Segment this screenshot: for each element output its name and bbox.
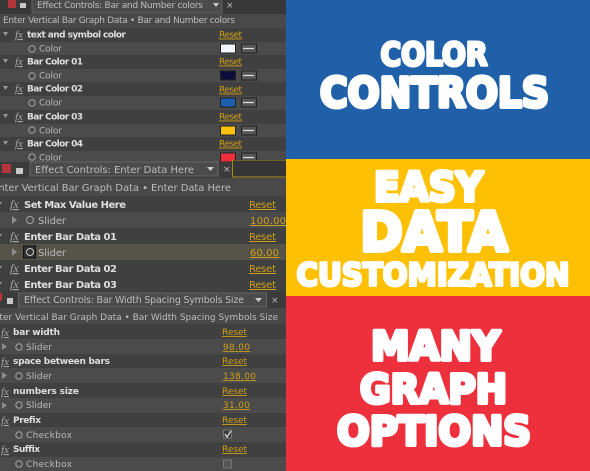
panel: bar width spacing symbols size: Reset bbox=[222, 387, 247, 397]
panel: bar and number colors: Color bbox=[39, 126, 62, 136]
panel: enter data here: Enter Bar Data 01 bbox=[24, 232, 117, 243]
panel: enter data here: Reset bbox=[249, 280, 276, 291]
panel: enter data here: Enter Bar Data 02 bbox=[24, 264, 117, 275]
panel: bar width spacing symbols size: 31.00 bbox=[223, 401, 250, 411]
panel: easy data customization: DATA bbox=[360, 200, 508, 264]
panel: bar and number colors: fx bbox=[15, 29, 23, 41]
panel: bar width spacing symbols size: Reset bbox=[222, 328, 247, 338]
panel: easy data customization: EASY bbox=[374, 165, 484, 211]
panel: bar and number colors: fx bbox=[15, 111, 23, 123]
panel: many graph options: MANY bbox=[371, 324, 501, 370]
panel: enter data here: Slider bbox=[38, 248, 67, 259]
panel: enter data here: Slider bbox=[38, 216, 67, 227]
panel: enter data here: Reset bbox=[249, 264, 276, 275]
panel: bar width spacing symbols size: fx bbox=[1, 386, 9, 398]
panel: bar width spacing symbols size: Effect Controls: Bar Width Spacing Symbols Size bbox=[24, 295, 244, 306]
panel: bar width spacing symbols size: Reset bbox=[222, 445, 247, 455]
panel: bar width spacing symbols size: Suffix bbox=[13, 445, 40, 455]
panel: enter data here: fx bbox=[10, 261, 19, 275]
panel: color controls bbox=[286, 0, 590, 159]
panel: enter data here: fx bbox=[10, 277, 19, 291]
panel: bar and number colors: Bar Color 01 bbox=[27, 58, 83, 68]
panel: bar width spacing symbols size: Slider bbox=[26, 343, 52, 353]
panel: many graph options: OPTIONS bbox=[337, 409, 531, 455]
panel: bar width spacing symbols size: fx bbox=[1, 327, 9, 339]
panel: enter data here: × bbox=[223, 165, 231, 175]
panel: bar width spacing symbols size bbox=[0, 292, 286, 471]
panel: bar width spacing symbols size: Slider bbox=[26, 401, 52, 411]
panel: enter data here: fx bbox=[10, 229, 19, 243]
panel: bar width spacing symbols size: fx bbox=[1, 356, 9, 368]
panel: easy data customization bbox=[286, 159, 590, 296]
panel: bar width spacing symbols size: Checkbox bbox=[26, 460, 73, 470]
panel: enter data here bbox=[0, 160, 286, 293]
panel: bar and number colors: Effect Controls: Bar and Number colors bbox=[37, 1, 203, 11]
panel: enter data here: Effect Controls: Enter Data Here bbox=[35, 165, 194, 176]
panel: bar and number colors bbox=[0, 0, 286, 164]
panel: enter data here: Reset bbox=[249, 200, 276, 211]
panel: bar width spacing symbols size: bar width bbox=[13, 328, 60, 338]
panel: bar width spacing symbols size: fx bbox=[1, 444, 9, 456]
panel: many graph options bbox=[286, 296, 590, 471]
panel: enter data here: 60.00 bbox=[250, 248, 279, 259]
panel: enter data here: fx bbox=[10, 197, 19, 211]
panel: bar width spacing symbols size: space between bars bbox=[13, 357, 110, 367]
panel: bar and number colors: fx bbox=[15, 138, 23, 150]
panel: bar width spacing symbols size: numbers size bbox=[13, 387, 79, 397]
panel: bar and number colors: Color bbox=[39, 154, 62, 164]
panel: color controls: CONTROLS bbox=[320, 69, 549, 117]
panel: color controls: COLOR bbox=[380, 36, 488, 74]
panel: bar and number colors: Color bbox=[39, 72, 62, 82]
panel: bar and number colors: fx bbox=[15, 83, 23, 95]
panel: bar and number colors: Color bbox=[39, 44, 62, 54]
panel: bar and number colors: Reset bbox=[219, 140, 242, 150]
panel: bar and number colors: Bar Color 03 bbox=[27, 112, 83, 122]
panel: bar and number colors: × bbox=[226, 1, 234, 11]
panel: bar and number colors: Bar Color 04 bbox=[27, 140, 83, 150]
panel: bar and number colors: Bar Color 02 bbox=[27, 84, 83, 94]
panel: bar and number colors: text and symbol color bbox=[27, 30, 127, 40]
panel: bar width spacing symbols size: Reset bbox=[222, 416, 247, 426]
panel: easy data customization: CUSTOMIZATION bbox=[296, 258, 570, 294]
panel: bar width spacing symbols size: 138.00 bbox=[223, 372, 256, 382]
panel: enter data here: Set Max Value Here bbox=[24, 200, 126, 211]
panel: bar width spacing symbols size: fx bbox=[1, 415, 9, 427]
panel: bar width spacing symbols size: Checkbox bbox=[26, 431, 73, 441]
panel: bar width spacing symbols size: Reset bbox=[222, 357, 247, 367]
panel: enter data here: 100.00 bbox=[250, 216, 286, 227]
panel: bar and number colors: Reset bbox=[219, 112, 242, 122]
panel: enter data here: Reset bbox=[249, 232, 276, 243]
panel: bar and number colors: Reset bbox=[219, 30, 242, 40]
panel: bar width spacing symbols size: × bbox=[271, 296, 279, 306]
panel: bar and number colors: fx bbox=[15, 56, 23, 68]
panel: bar width spacing symbols size: Slider bbox=[26, 372, 52, 382]
panel: bar and number colors: Enter Vertical Bar Graph Data • Bar and Number colors bbox=[3, 16, 235, 26]
panel: bar width spacing symbols size: Prefix bbox=[13, 416, 41, 426]
panel: many graph options: GRAPH bbox=[360, 367, 507, 413]
panel: bar and number colors: Reset bbox=[219, 58, 242, 68]
panel: enter data here: Enter Bar Data 03 bbox=[24, 280, 117, 291]
panel: bar and number colors: Reset bbox=[219, 86, 242, 96]
panel: bar and number colors: Color bbox=[39, 98, 62, 108]
panel: bar width spacing symbols size: 98.00 bbox=[223, 343, 250, 353]
